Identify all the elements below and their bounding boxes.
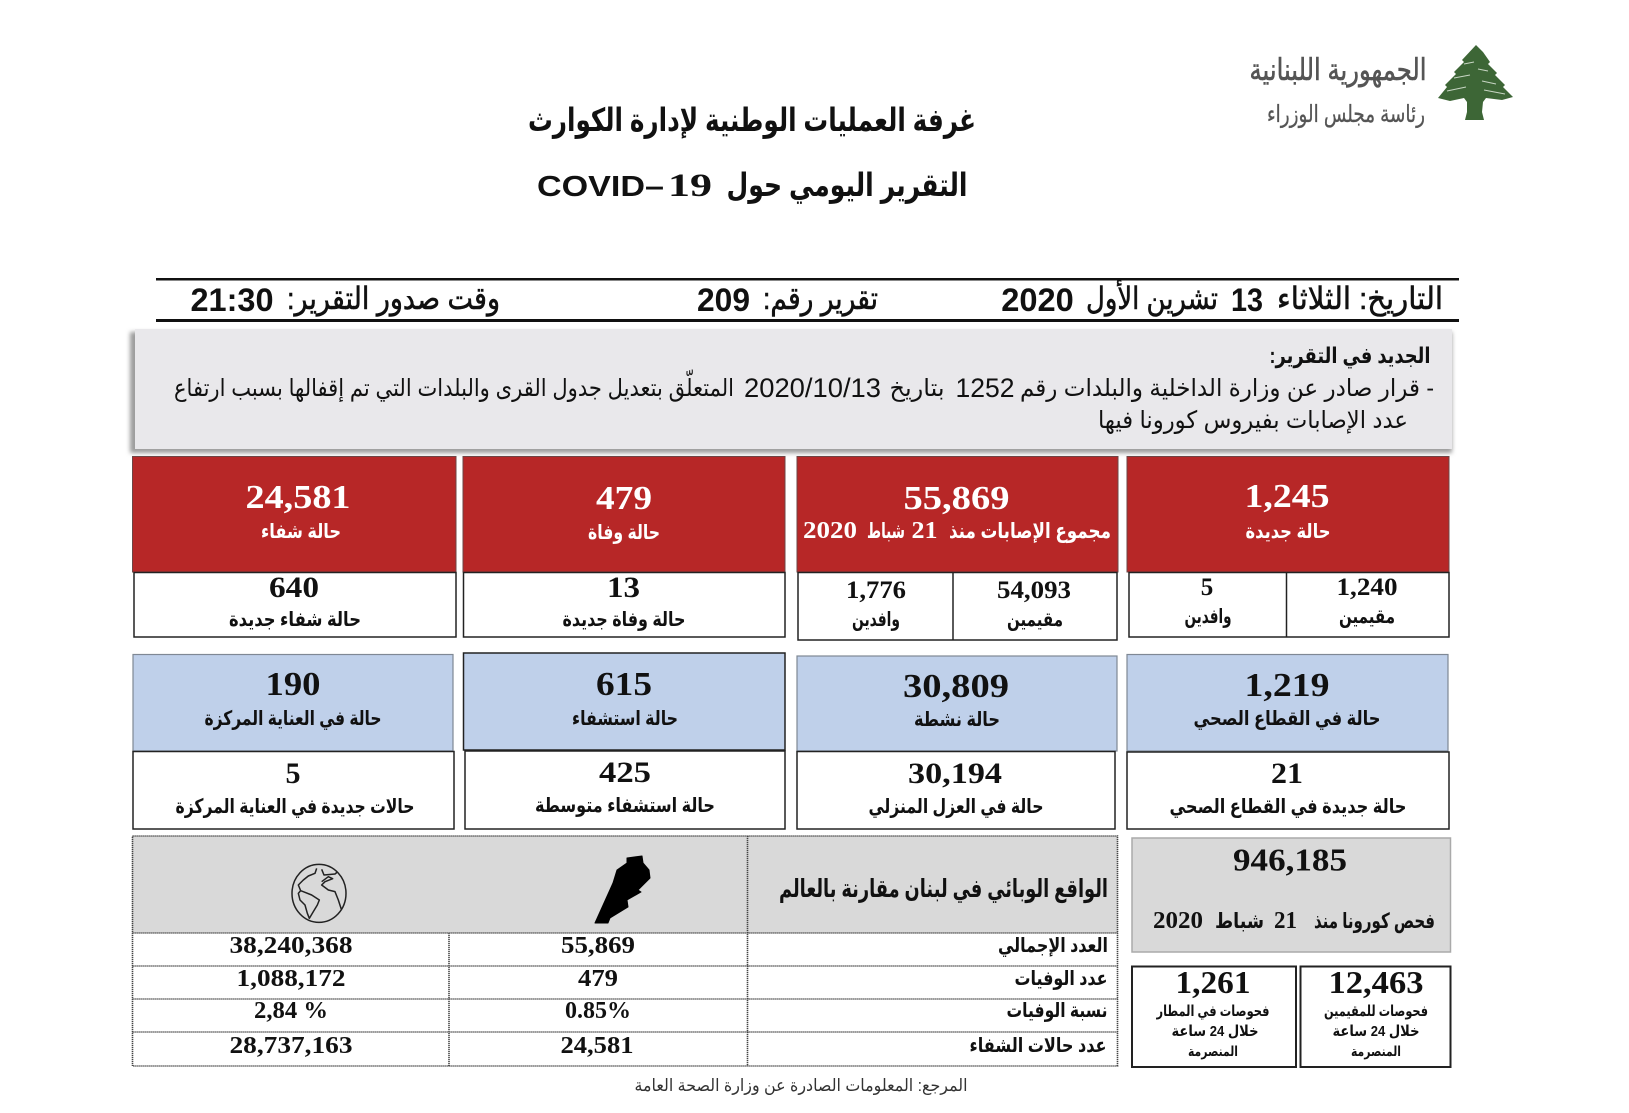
new ICU number: 5 <box>286 757 300 790</box>
panel text line 1: بتاريخ <box>890 375 944 402</box>
new health sector number: 21 <box>1271 757 1303 790</box>
row: recoveries: 24,581 <box>560 1033 634 1059</box>
panel text line 2: عدد الإصابات بفيروس كورونا فيها <box>1098 407 1408 434</box>
moderate number: 425 <box>599 756 651 789</box>
ICU label: حالة في العناية المركزة <box>204 708 382 731</box>
total infections label <box>803 518 1111 544</box>
title line 2: COVID– <box>537 171 664 203</box>
logo text line 2: رئاسة مجلس الوزراء <box>1267 101 1425 128</box>
icon: globe <box>292 864 346 922</box>
new travellers label: وافدين <box>1184 606 1232 628</box>
total infections label: 21 <box>912 518 938 544</box>
new recoveries: 640 <box>269 571 319 604</box>
residents label: مقيمين <box>1007 609 1063 631</box>
row: deaths: 1,088,172 <box>236 966 346 992</box>
card: deaths <box>463 456 785 637</box>
report time <box>190 281 500 318</box>
total infections label: مجموع الإصابات منذ <box>949 520 1111 543</box>
row: deaths <box>236 966 1108 992</box>
logo text line 1: الجمهورية اللبنانية <box>1250 54 1426 88</box>
card: recoveries <box>132 456 456 637</box>
moderate label: حالة استشفاء متوسطة <box>535 795 715 817</box>
report date: 2020 <box>1001 282 1074 318</box>
total tests label: شباط <box>1215 910 1264 933</box>
row: recoveries: عدد حالات الشفاء <box>970 1035 1106 1057</box>
row: total: 55,869 <box>561 933 635 959</box>
resident tests label: خلال 24 ساعة <box>1332 1023 1420 1040</box>
icon: cedar tree <box>1438 45 1513 120</box>
card: resident tests <box>1300 964 1450 1067</box>
total tests label <box>1153 908 1435 934</box>
travellers label: وافدين <box>852 609 900 631</box>
new cases number: 1,245 <box>1244 478 1330 515</box>
panel: total tests <box>1132 838 1450 952</box>
resident tests number: 12,463 <box>1328 964 1424 1000</box>
airport tests label: المنصرمة <box>1188 1043 1238 1060</box>
card: health sector <box>1127 654 1449 829</box>
panel text line 1 <box>174 370 1434 403</box>
report date: التاريخ: الثلاثاء <box>1277 281 1443 317</box>
deaths label: حالة وفاة <box>588 522 660 544</box>
row: death rate: نسبة الوفيات <box>1006 1000 1108 1022</box>
title line 1: غرفة العمليات الوطنية لإدارة الكوارث <box>528 102 976 139</box>
airport tests number: 1,261 <box>1176 964 1250 1000</box>
new travellers number: 5 <box>1201 574 1213 601</box>
card: airport tests <box>1132 964 1296 1067</box>
report date <box>1001 279 1443 318</box>
row: recoveries: 28,737,163 <box>230 1033 352 1059</box>
hospitalised label: حالة استشفاء <box>572 708 678 730</box>
row: death rate: 2,84 % <box>254 998 328 1024</box>
panel text line 1: 2020/10/13 <box>744 373 881 403</box>
total tests label: فحص كورونا منذ <box>1314 910 1435 933</box>
health sector number: 1,219 <box>1244 667 1330 704</box>
table heading: الواقع الوبائي في لبنان مقارنة بالعالم <box>779 875 1108 904</box>
title line 2: 19 <box>668 168 712 204</box>
card: active cases <box>797 656 1117 829</box>
residents number: 54,093 <box>997 577 1071 604</box>
recoveries total: 24,581 <box>246 479 350 516</box>
row: total: العدد الإجمالي <box>998 935 1108 958</box>
panel text line 1: 1252 <box>956 373 1014 403</box>
panel text line 1: المتعلّق بتعديل جدول القرى والبلدات التي تم إقفالها بسبب ارتفاع <box>174 370 734 403</box>
title line 2: التقرير اليومي حول <box>726 167 968 204</box>
new health sector label: حالة جديدة في القطاع الصحي <box>1170 796 1406 819</box>
logo: Lebanese Presidency of the Council of Ministers <box>1250 45 1513 128</box>
new residents label: مقيمين <box>1339 606 1395 628</box>
source note: المرجع: المعلومات الصادرة عن وزارة الصحة العامة <box>634 1076 968 1096</box>
deaths total: 479 <box>596 480 652 517</box>
card: intensive care <box>133 654 454 829</box>
new recoveries label: حالة شفاء جديدة <box>229 609 361 631</box>
report date: تشرين الأول <box>1086 279 1218 317</box>
resident tests label <box>1324 1003 1428 1060</box>
airport tests label: خلال 24 ساعة <box>1172 1023 1258 1040</box>
ICU number: 190 <box>266 666 320 703</box>
report date: 13 <box>1231 282 1263 318</box>
title <box>528 102 976 204</box>
total infections label: شباط <box>867 520 905 543</box>
report number: تقرير رقم: <box>763 281 878 317</box>
card: new cases <box>1127 456 1449 637</box>
hospitalised number: 615 <box>596 666 652 703</box>
total infections number: 55,869 <box>904 480 1010 517</box>
row: recoveries <box>230 1033 1106 1059</box>
title line 2 <box>537 167 968 204</box>
airport tests label: فحوصات في المطار <box>1156 1003 1270 1020</box>
home isolation label: حالة في العزل المنزلي <box>868 796 1044 819</box>
new deaths: 13 <box>607 571 640 604</box>
new deaths label: حالة وفاة جديدة <box>562 609 686 631</box>
new residents number: 1,240 <box>1336 574 1398 601</box>
report info bar <box>156 278 1459 322</box>
panel text line 1: - قرار صادر عن وزارة الداخلية والبلدات رقم <box>1020 375 1434 402</box>
travellers number: 1,776 <box>846 577 906 604</box>
report number: 209 <box>697 282 750 318</box>
report time: 21:30 <box>190 282 274 318</box>
card: hospitalised <box>464 653 785 829</box>
panel: new in the report <box>130 329 1452 453</box>
row: death rate: 0.85% <box>565 998 631 1024</box>
new cases label: حالة جديدة <box>1246 521 1330 543</box>
row: total: 38,240,368 <box>230 933 352 959</box>
resident tests label: المنصرمة <box>1351 1043 1401 1060</box>
row: deaths: 479 <box>578 966 618 992</box>
row: total <box>230 933 1108 959</box>
recoveries label: حالة شفاء <box>261 521 341 543</box>
comparison table: Lebanon vs world <box>132 836 1118 1066</box>
active number: 30,809 <box>903 668 1009 705</box>
row: death rate <box>254 998 1108 1024</box>
home isolation number: 30,194 <box>908 757 1002 790</box>
card: total infections <box>797 456 1118 640</box>
new ICU label: حالات جديدة في العناية المركزة <box>176 796 414 819</box>
airport tests label <box>1156 1003 1270 1060</box>
report number <box>697 281 878 318</box>
icon: Lebanon map <box>595 856 650 923</box>
total tests label: 21 <box>1274 908 1297 934</box>
resident tests label: فحوصات للمقيمين <box>1324 1003 1428 1020</box>
report time: وقت صدور التقرير: <box>287 281 500 317</box>
total tests number: 946,185 <box>1233 842 1347 878</box>
health sector label: حالة في القطاع الصحي <box>1194 708 1380 731</box>
panel heading: الجديد في التقرير: <box>1270 343 1430 369</box>
row: deaths: عدد الوفيات <box>1014 968 1108 990</box>
total infections label: 2020 <box>803 518 857 544</box>
total tests label: 2020 <box>1153 908 1203 934</box>
active label: حالة نشطة <box>914 709 1000 731</box>
